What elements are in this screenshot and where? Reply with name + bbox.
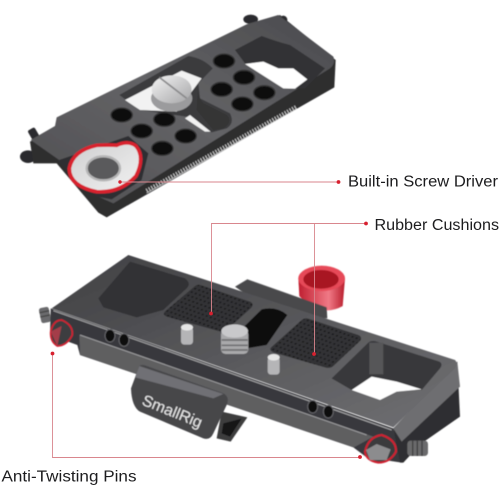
left stud xyxy=(39,306,51,324)
slot window xyxy=(119,56,232,132)
screw head xyxy=(151,75,192,112)
right end wall xyxy=(393,362,460,463)
front wall xyxy=(50,308,402,463)
quick release lever with brand: SmallRig xyxy=(140,392,205,432)
threaded screw xyxy=(221,324,248,354)
quick release lever with brand xyxy=(131,365,228,439)
right stud xyxy=(407,441,428,456)
side holes xyxy=(105,329,333,418)
rubber cushion right xyxy=(270,318,361,368)
mounting holes xyxy=(111,54,275,155)
callout: anti-twisting pins xyxy=(2,352,362,486)
callout: built-in screw driver: Built-in Screw Driver xyxy=(348,174,498,190)
top face xyxy=(52,255,457,427)
anti-twisting pin left xyxy=(51,320,72,346)
built-in screw driver disc xyxy=(69,143,141,192)
anti-twisting pin right xyxy=(365,435,396,463)
rear block xyxy=(235,279,327,320)
large window xyxy=(235,36,325,89)
quick release lever shadow xyxy=(217,412,247,442)
callout: rubber cushions: Rubber Cushions xyxy=(374,217,499,234)
plate screws xyxy=(20,15,287,163)
locating pin right xyxy=(268,354,280,375)
plate side wall xyxy=(30,15,336,217)
callout: built-in screw driver xyxy=(118,174,498,190)
end window xyxy=(332,341,442,400)
bottom plate xyxy=(39,255,460,463)
central slot xyxy=(241,308,287,348)
red knob xyxy=(298,266,345,310)
pocket xyxy=(98,262,189,317)
locating pin left xyxy=(181,324,193,345)
top plate xyxy=(20,15,336,217)
callout: anti-twisting pins: Anti-Twisting Pins xyxy=(2,468,137,486)
screw driver recess xyxy=(57,136,148,199)
plate top face xyxy=(31,15,334,203)
rubber cushion left xyxy=(164,285,253,332)
callout: rubber cushions xyxy=(209,217,499,356)
ruler scale xyxy=(147,107,297,193)
